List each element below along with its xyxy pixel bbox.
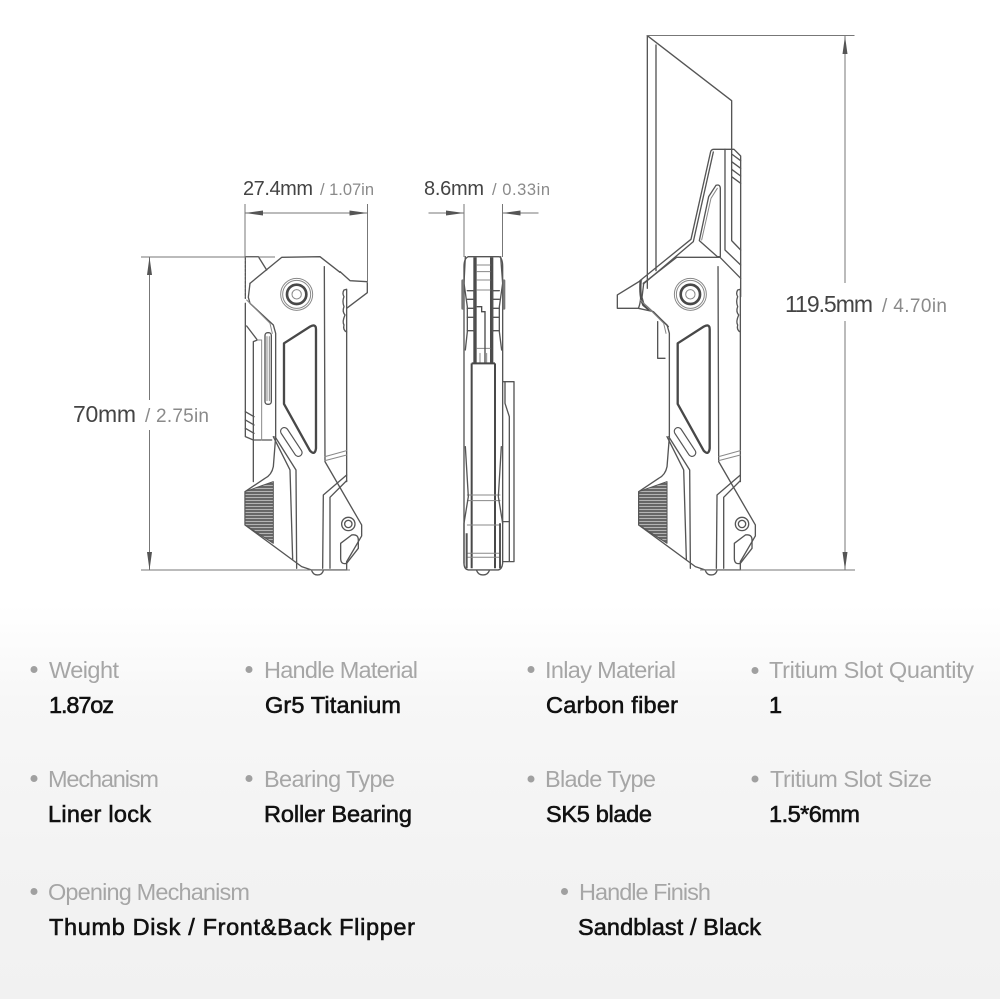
spec: handle finish [561,879,761,940]
spec: inlay material: Carbon fiber [546,692,678,718]
handle upper frame [640,149,741,297]
label: closed length: / 2.75in [145,406,209,427]
spec: handle material: Gr5 Titanium [265,692,401,718]
label: width [243,178,374,200]
blade edge of closed knife [245,257,272,482]
knife: closed front view [245,257,367,575]
spec: weight: 1.87oz [49,692,114,718]
dimension: open length [647,36,855,570]
spec: tritium slot quantity [752,657,974,718]
spec: inlay material: Inlay Material [545,657,676,683]
knife: open view [617,36,741,358]
spec: blade type [528,766,656,827]
spec: tritium slot quantity: Tritium Slot Quantity [769,657,974,683]
pocket clip [503,382,514,562]
spec: bearing type [246,766,412,827]
spec: opening mechanism: Opening Mechanism [48,879,250,905]
spec: bearing type: Bearing Type [264,766,395,792]
spec: mechanism: Liner lock [48,801,151,827]
dimension: thickness [428,204,538,257]
spec: tritium slot quantity: 1 [769,692,782,718]
label: thickness: 8.6mm [424,178,484,200]
spec: blade type: Blade Type [545,766,656,792]
pivot knob [477,571,489,575]
spec: tritium slot size: Tritium Slot Size [770,766,932,792]
spec: inlay material [528,657,678,718]
spec: handle material [246,657,418,718]
label: thickness: / 0.33in [492,181,550,199]
spec: handle material: Handle Material [264,657,418,683]
spec: blade type: SK5 blade [546,801,652,827]
dimension: width [245,204,368,283]
spec: mechanism [30,766,159,827]
label: closed length [73,401,209,427]
spec: weight: Weight [49,657,119,683]
front flipper [340,272,367,308]
blade [647,36,732,288]
knife handle of open view [639,267,755,575]
dimension: closed length [141,257,350,570]
spec: handle finish: Handle Finish [579,879,711,905]
spec: handle finish: Sandblast / Black [578,914,761,940]
spec: opening mechanism: Thumb Disk / Front&Back Flipper [49,914,415,940]
label: closed length: 70mm [73,401,136,427]
spec: mechanism: Mechanism [48,766,159,792]
knife: side view [463,257,514,575]
spec: bearing type: Roller Bearing [264,801,412,827]
spec: tritium slot size [752,766,932,827]
spec: opening mechanism [30,879,415,940]
label: thickness [424,178,550,200]
spec: tritium slot size: 1.5*6mm [769,801,860,827]
front flipper [617,280,642,308]
spec: weight [30,657,119,718]
handle top edge [250,257,340,283]
label: open length: / 4.70in [882,296,947,317]
label: open length: 119.5mm [785,291,873,317]
label: width: / 1.07in [320,181,374,199]
label: open length [785,291,947,317]
label: width: 27.4mm [243,178,313,200]
